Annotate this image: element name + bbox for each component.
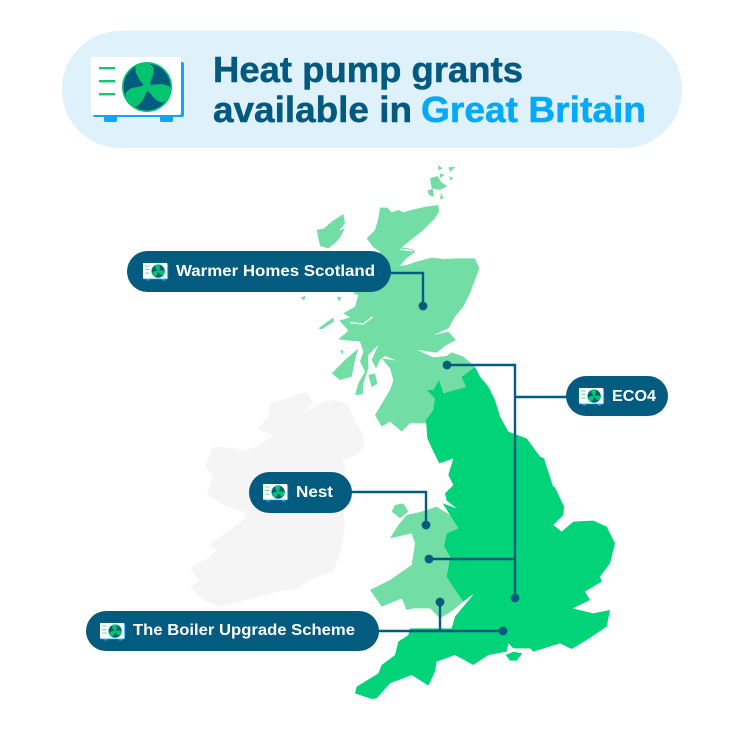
map: England [355, 367, 615, 699]
connector: Warmer Homes Scotland [388, 273, 426, 309]
western isles [301, 296, 377, 387]
label: Nest: Nest [296, 484, 333, 501]
label: Warmer Homes Scotland [127, 251, 391, 292]
connector: ECO4 [426, 362, 568, 601]
label: Nest [249, 472, 352, 513]
header banner [62, 31, 682, 148]
Isle of Wight [506, 652, 522, 661]
icon: heat pump [91, 57, 184, 122]
Anglesey [392, 503, 408, 518]
title: available in [213, 89, 412, 130]
connector: Nest [350, 492, 429, 528]
icon: heat pump [579, 388, 604, 406]
title: Heat pump grants [213, 49, 523, 90]
label: ECO4 [566, 376, 668, 416]
label: The Boiler Upgrade Scheme [86, 611, 379, 651]
Orkney and Shetland [427, 165, 456, 199]
label: The Boiler Upgrade Scheme: The Boiler Upgrade Scheme [133, 622, 355, 639]
Scottish sea lochs [350, 249, 413, 324]
icon: heat pump [100, 623, 125, 641]
label: Warmer Homes Scotland: Warmer Homes Scotland [176, 263, 375, 280]
map: Ireland [190, 392, 364, 607]
icon: heat pump [143, 263, 168, 281]
mainland Scotland [338, 205, 479, 432]
title [213, 49, 646, 130]
map: Scotland [301, 165, 479, 432]
title: Great Britain [421, 89, 646, 130]
icon: heat pump [263, 484, 288, 502]
Outer Hebrides [317, 214, 345, 248]
connector: The Boiler Upgrade Scheme [378, 599, 506, 634]
label: ECO4: ECO4 [612, 388, 656, 405]
map: Wales [370, 503, 463, 618]
